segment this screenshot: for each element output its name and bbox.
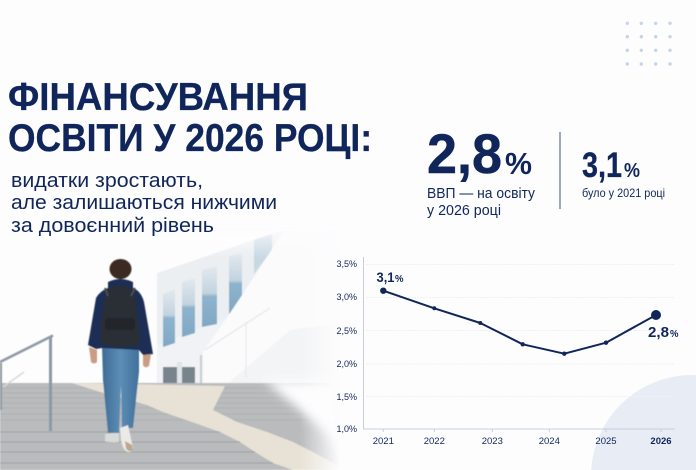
key figure: 3,1%: 3,1 [582, 146, 622, 185]
y axis labels [336, 259, 357, 434]
key figure: 2,8%: % [505, 146, 532, 181]
y axis labels: 3,0% [336, 292, 357, 302]
label: 3,1%: 3,1 [376, 269, 395, 285]
x axis labels: 2021 [373, 436, 394, 447]
x axis labels: 2026 [650, 436, 672, 447]
y axis labels: 2,0% [336, 359, 357, 369]
y axis labels: 1,0% [336, 424, 357, 434]
gridlines and axes [364, 257, 675, 432]
data line [383, 291, 656, 354]
label: 2,8% [648, 325, 679, 341]
title: ОСВІТИ У 2026 РОЦІ: [8, 117, 372, 160]
label: 3,1%: % [395, 274, 404, 285]
subtitle: але залишаються нижчими [11, 192, 277, 214]
data points [380, 288, 661, 356]
railing [0, 336, 53, 431]
key figure: 3,1%: було у 2021 році [582, 186, 665, 200]
subtitle: за довоєнний рівень [11, 215, 214, 237]
key figure: 2,8%: 2,8 [427, 122, 502, 185]
key figure: 2,8%: ВВП — на освіту [427, 186, 536, 202]
key figure: 2,8%: у 2026 році [427, 203, 501, 219]
key figure: 2,8% [427, 122, 536, 219]
white curved wall [204, 242, 310, 383]
x axis labels: 2025 [595, 436, 617, 447]
subtitle: видатки зростають, [11, 170, 203, 192]
x axis labels: 2023 [482, 436, 503, 447]
photo: student walking up the stairs [0, 222, 345, 470]
decorative circle [591, 375, 696, 470]
building [157, 230, 283, 385]
y axis labels: 3,5% [336, 259, 357, 269]
line chart: education spending share of GDP [336, 257, 679, 447]
y axis labels: 2,5% [336, 326, 357, 336]
student [88, 259, 153, 452]
key figure: 3,1%: % [624, 160, 640, 182]
y axis labels: 1,5% [336, 392, 357, 402]
subtitle [11, 170, 277, 237]
divider [559, 132, 561, 209]
title: ФІНАНСУВАННЯ [8, 76, 308, 119]
x axis labels [373, 436, 672, 447]
x axis labels: 2022 [424, 436, 445, 447]
dot grid [626, 22, 672, 66]
key figure: 3,1% [582, 146, 665, 200]
x axis labels: 2024 [539, 436, 560, 447]
label: 2,8%: 2,8 [648, 325, 669, 341]
right-side fade [305, 324, 340, 470]
stairs [0, 380, 345, 470]
label: 2,8%: % [670, 329, 679, 340]
title [8, 76, 372, 160]
